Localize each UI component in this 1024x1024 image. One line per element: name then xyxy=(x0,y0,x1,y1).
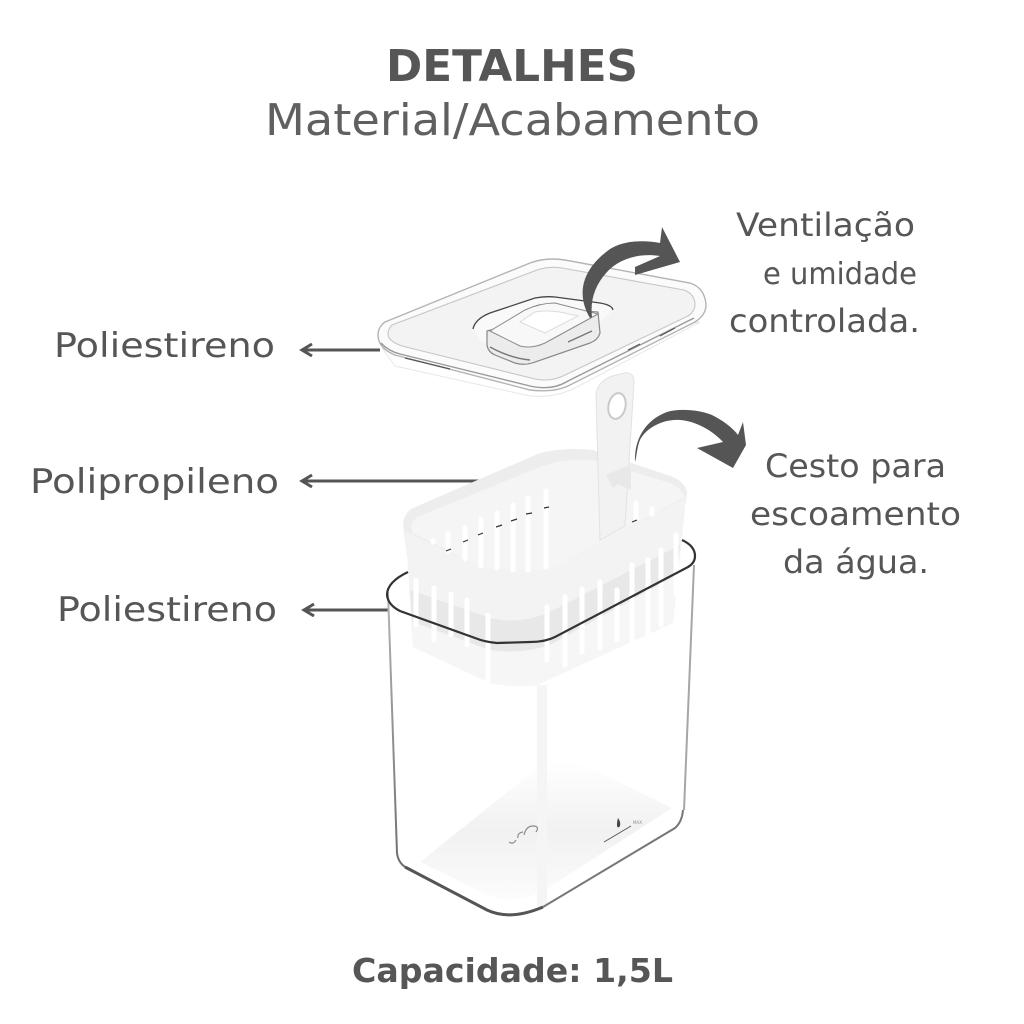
basket rim xyxy=(403,449,687,590)
icon: max water line: MAX xyxy=(633,820,642,825)
label: Poliestireno container: Poliestireno xyxy=(57,590,277,630)
lid handle xyxy=(487,309,600,364)
text: ventilation note: Ventilação xyxy=(736,206,915,244)
arrow: basket pointer xyxy=(302,475,482,487)
lid outer skirt xyxy=(382,322,700,396)
text: basket note: da água. xyxy=(783,543,929,581)
icon: max water line xyxy=(604,818,642,842)
text: basket note xyxy=(750,447,961,581)
lid body xyxy=(378,259,706,391)
container rim xyxy=(387,540,695,643)
handle top face xyxy=(490,303,598,347)
inner slot shadow ticks xyxy=(446,507,637,551)
arrow: basket curve xyxy=(635,410,746,468)
capacity: Capacidade: 1,5L xyxy=(352,951,673,990)
lid recess xyxy=(473,297,613,350)
arrow: ventilation curve xyxy=(583,227,680,318)
basket inner slots xyxy=(433,491,652,570)
container floor xyxy=(420,762,672,899)
container centre reflection xyxy=(537,685,547,907)
basket lower body xyxy=(407,510,685,686)
basket inner xyxy=(411,460,685,570)
heading: Detalhes: DETALHES xyxy=(386,41,638,92)
handle latch xyxy=(606,466,631,490)
container side edges xyxy=(388,592,405,867)
label: Polipropileno: Polipropileno xyxy=(30,462,279,502)
text: basket note: Cesto para xyxy=(765,447,946,485)
title xyxy=(265,41,760,146)
subheading: Material/Acabamento: Material/Acabamento xyxy=(265,95,760,146)
basket outer slots xyxy=(416,535,676,680)
handle hole xyxy=(606,392,628,420)
container body xyxy=(387,540,696,915)
lid inner rim xyxy=(388,267,695,380)
label: Poliestireno lid: Poliestireno xyxy=(54,326,275,366)
lower part seen through container xyxy=(413,575,677,686)
icon: recycling marks xyxy=(509,826,537,843)
lid lower edge highlights xyxy=(381,318,694,388)
arrow: lid pointer xyxy=(302,344,380,356)
basket shaded band xyxy=(410,545,680,652)
text: basket note: escoamento xyxy=(750,495,961,533)
handle strip xyxy=(596,373,634,540)
arrow: container pointer xyxy=(304,604,388,616)
text: ventilation note: controlada. xyxy=(729,302,920,340)
basket front rim band xyxy=(403,497,687,590)
text: ventilation note: e umidade xyxy=(763,257,917,292)
text: ventilation note xyxy=(729,206,920,340)
basket xyxy=(403,373,687,686)
lid xyxy=(378,259,706,396)
